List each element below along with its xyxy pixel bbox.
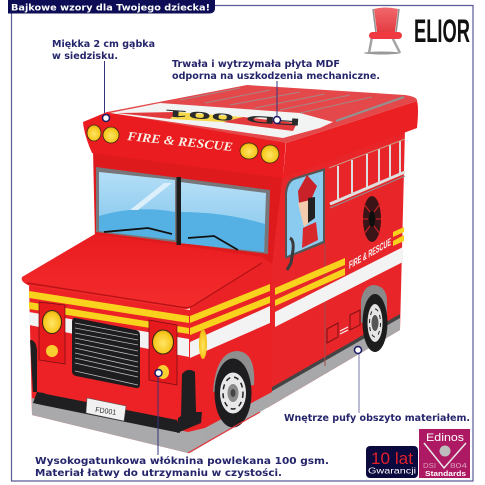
- grey side skirt: [188, 314, 400, 453]
- badge: 10 lat warranty: [366, 446, 418, 478]
- red shadow edge: [188, 412, 260, 453]
- cab front upper: [93, 150, 283, 265]
- side text: FIRE & RESCUE: [349, 236, 391, 272]
- side stripes: [275, 227, 404, 327]
- cab side panel: [190, 258, 272, 436]
- rear wheel: [361, 285, 388, 352]
- radiator grille: [72, 318, 140, 388]
- callout: foam text: Miękka 2 cm gąbka: [52, 39, 155, 50]
- ladder rails: [329, 139, 405, 208]
- windshield: [96, 167, 270, 254]
- lid lamps: [87, 125, 279, 163]
- callout: interior text: Wnętrze pufy obszyto materiałem.: [284, 413, 470, 424]
- badge: Edinos standards: [419, 429, 470, 478]
- banner heading: [8, 0, 215, 14]
- badge: Edinos standards: 804: [450, 463, 467, 470]
- lid top: [107, 85, 417, 143]
- licence plate: FD001: [95, 405, 117, 417]
- truck side body: [267, 130, 405, 408]
- door seam: [324, 243, 326, 366]
- left light panel: [39, 302, 65, 364]
- callout: fabric text: [35, 456, 329, 479]
- front stripes: [29, 291, 189, 357]
- callout: fabric text: Wysokogatunkowa włóknina powlekana 100 gsm.: [35, 456, 329, 467]
- callout: foam text: w siedzisku.: [52, 51, 118, 62]
- hood: [22, 234, 263, 309]
- banner heading: Bajkowe wzory dla Twojego dziecka!: [11, 4, 210, 14]
- callout: MDF text: Trwała i wytrzymała płyta MDF: [172, 59, 340, 70]
- icon: fire emblem: [363, 196, 381, 242]
- grey bottom band: [32, 398, 205, 453]
- badge: 10 lat warranty: Gwarancji: [368, 466, 416, 476]
- callout line: interior: [354, 346, 362, 413]
- callout: foam text: [52, 39, 155, 62]
- fire truck illustration: [22, 85, 418, 453]
- icon: red chair logo: [364, 8, 402, 54]
- callout line: foam: [102, 61, 110, 122]
- badge: Edinos standards: DSI: [423, 463, 436, 470]
- lid text: FIRE & RESCUE: [126, 129, 234, 154]
- callout: MDF text: [172, 59, 380, 82]
- lid top: FD 001: [164, 107, 301, 127]
- cab side stripes: [190, 284, 270, 358]
- callout line: fabric: [155, 370, 162, 455]
- callout: MDF text: odporna na uszkodzenia mechaniczne.: [172, 71, 380, 82]
- badge: Edinos standards: Edinos: [426, 432, 465, 444]
- front wheel: [213, 351, 254, 428]
- badge: Edinos standards: Standards: [425, 469, 466, 478]
- side lockers: [327, 310, 360, 343]
- side marker light: [199, 329, 207, 359]
- licence plate: [86, 398, 126, 421]
- callout line: MDF: [274, 81, 280, 124]
- badge: 10 lat warranty: 10 lat: [371, 449, 413, 468]
- lid side: [283, 101, 418, 178]
- black bumper: [30, 340, 202, 433]
- truck front face: [29, 284, 190, 453]
- callout: fabric text: Materiał łatwy do utrzymaniu w czystości.: [35, 468, 282, 479]
- lid front: [83, 112, 286, 178]
- right light panel: [149, 320, 177, 385]
- driver window: [285, 168, 325, 270]
